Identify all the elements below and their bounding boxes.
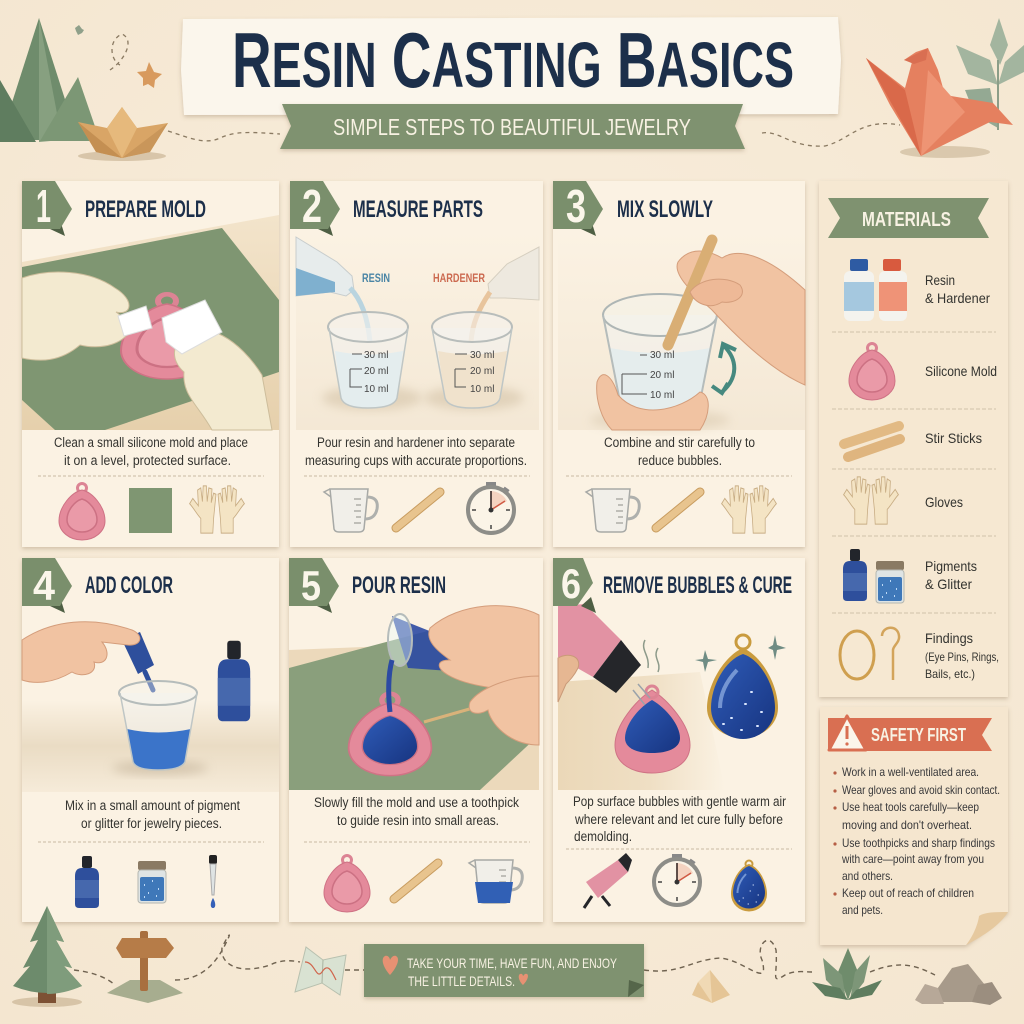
step text bbox=[54, 435, 248, 468]
safety bullet list: and others. bbox=[842, 869, 893, 883]
illustration: mixing cup bbox=[590, 294, 730, 430]
label: resin: RESIN bbox=[362, 271, 390, 285]
step text: Clean a small silicone mold and place bbox=[54, 435, 248, 450]
icon: origami bird bbox=[866, 48, 1013, 158]
illustration: lower hand bbox=[597, 375, 708, 430]
step number badge 1 bbox=[22, 180, 72, 236]
step text: to guide resin into small areas. bbox=[337, 813, 499, 828]
illustration: resin cup bbox=[322, 312, 422, 410]
step text: where relevant and let cure fully before bbox=[574, 812, 783, 827]
material: resin and hardener bbox=[844, 259, 990, 321]
material: pigments and glitter: Pigments bbox=[925, 558, 977, 574]
step number badge 4 bbox=[22, 558, 72, 613]
material: gloves bbox=[844, 477, 963, 524]
top decoration: origami tree bbox=[0, 18, 100, 142]
material: pigments and glitter: & Glitter bbox=[925, 576, 972, 592]
illustration: table and mat bbox=[289, 625, 539, 790]
illustration: resin cup: 30 ml bbox=[364, 350, 388, 361]
illustration: backdrop bbox=[558, 232, 805, 430]
illustration: tilted pouring cup bbox=[388, 614, 472, 712]
panel: step 3 mix slowly bbox=[553, 180, 805, 547]
illustration: gripping finger bbox=[690, 279, 742, 306]
material: gloves: Gloves bbox=[925, 494, 963, 510]
illustration: hardener cup bbox=[424, 312, 524, 410]
material: resin and hardener: Resin bbox=[925, 272, 955, 288]
illustration: upper hand bbox=[429, 606, 539, 692]
illustration: pink mold bbox=[121, 294, 213, 379]
step text bbox=[305, 435, 527, 468]
step number badge 6 bbox=[553, 558, 596, 613]
step text: Combine and stir carefully to bbox=[604, 435, 755, 450]
step heading: ADD COLOR bbox=[85, 572, 173, 599]
illustration: pigment bottle bbox=[218, 641, 250, 721]
material: findings: Findings bbox=[925, 630, 973, 646]
step text bbox=[573, 794, 786, 844]
illustration: mold filled with resin bbox=[349, 694, 431, 776]
subtitle ribbon bbox=[280, 104, 745, 149]
label: hardener: HARDENER bbox=[433, 271, 485, 285]
illustration: hardener cup: 30 ml bbox=[470, 350, 494, 361]
panel: step 2 measure parts bbox=[290, 180, 543, 547]
illustration: mold with blue resin bbox=[615, 686, 690, 773]
icon: sparkles bbox=[695, 635, 786, 672]
safety bullet list: moving and don't overheat. bbox=[842, 818, 972, 832]
panel: materials bbox=[819, 181, 1008, 697]
safety bullet list: with care—point away from you bbox=[841, 852, 984, 866]
step text: reduce bubbles. bbox=[638, 453, 722, 468]
step text: Mix in a small amount of pigment bbox=[65, 798, 240, 813]
step heading: MEASURE PARTS bbox=[353, 196, 483, 223]
tool icons bbox=[75, 855, 217, 908]
step text: Pour resin and hardener into separate bbox=[317, 435, 515, 450]
safety ribbon bbox=[828, 716, 992, 751]
step text bbox=[314, 795, 519, 828]
illustration: stir stick bbox=[668, 240, 712, 345]
step number badge 4: 4 bbox=[33, 562, 56, 609]
step text: demolding. bbox=[574, 829, 632, 844]
materials ribbon bbox=[828, 198, 989, 238]
step text: measuring cups with accurate proportions. bbox=[305, 453, 527, 468]
panel: step 1 prepare mold bbox=[22, 180, 279, 547]
illustration: hardener cup: 20 ml bbox=[470, 366, 494, 377]
illustration: mixing cup: 30 ml bbox=[650, 350, 674, 361]
material: findings bbox=[840, 628, 999, 681]
icon: origami leaves bbox=[956, 18, 1024, 130]
illustration: hand with dropper bottle bbox=[22, 622, 154, 690]
title banner bbox=[181, 16, 841, 115]
safety bullet list: and pets. bbox=[842, 903, 883, 917]
step number badge 2: 2 bbox=[302, 180, 322, 232]
illustration: finished pendant bbox=[707, 635, 778, 739]
material: findings: Bails, etc.) bbox=[925, 667, 975, 681]
dashed trails at top bbox=[110, 34, 900, 146]
icon: small paper stars bbox=[75, 25, 162, 88]
icon: origami boat bbox=[78, 107, 168, 161]
safety bullet list: Use heat tools carefully—keep bbox=[842, 800, 979, 814]
illustration: wood surface bbox=[558, 672, 725, 790]
illustration: resin cup: 20 ml bbox=[364, 366, 388, 377]
step text: or glitter for jewelry pieces. bbox=[81, 816, 222, 831]
step text bbox=[65, 798, 240, 831]
material: findings: (Eye Pins, Rings, bbox=[925, 650, 999, 664]
material: stir sticks bbox=[844, 426, 982, 457]
step heading: POUR RESIN bbox=[352, 572, 446, 599]
tool icons bbox=[59, 484, 244, 540]
step heading: PREPARE MOLD bbox=[85, 196, 206, 223]
icon: small heart bbox=[519, 974, 528, 985]
material: stir sticks: Stir Sticks bbox=[925, 430, 982, 446]
tool icons bbox=[324, 856, 522, 912]
illustration: hardener cup: 10 ml bbox=[470, 384, 494, 395]
illustration: backdrop bbox=[22, 700, 279, 792]
step heading: REMOVE BUBBLES & CURE bbox=[603, 572, 792, 599]
step text: Slowly fill the mold and use a toothpick bbox=[314, 795, 519, 810]
panel: safety first bbox=[820, 707, 1008, 945]
illustration: mixing cup: 20 ml bbox=[650, 370, 674, 381]
step text: Pop surface bubbles with gentle warm air bbox=[573, 794, 786, 809]
safety ribbon: SAFETY FIRST bbox=[871, 725, 966, 745]
step number badge 1: 1 bbox=[36, 180, 51, 232]
materials ribbon: MATERIALS bbox=[862, 209, 951, 231]
illustration: heat gun and hand bbox=[558, 604, 659, 705]
step number badge 5: 5 bbox=[301, 562, 321, 609]
illustration: mixing cup: 10 ml bbox=[650, 390, 674, 401]
material: resin and hardener: & Hardener bbox=[925, 290, 990, 306]
illustration: table and mat bbox=[22, 215, 279, 430]
step heading: MIX SLOWLY bbox=[617, 196, 713, 223]
icon: stir arrow bbox=[712, 344, 736, 393]
icon: paper plant bbox=[812, 948, 882, 1000]
safety bullet list: Keep out of reach of children bbox=[842, 886, 974, 900]
tool icons bbox=[584, 853, 767, 912]
title: RESIN CASTING BASICS bbox=[232, 16, 794, 104]
safety bullet list: Work in a well-ventilated area. bbox=[842, 765, 979, 779]
illustration: backdrop bbox=[296, 232, 539, 430]
step text: it on a level, protected surface. bbox=[64, 453, 231, 468]
material: silicone mold bbox=[849, 344, 997, 400]
illustration: resin bottle bbox=[296, 237, 370, 342]
step number badge 5 bbox=[289, 558, 339, 613]
page curl bbox=[966, 912, 1008, 945]
note text: TAKE YOUR TIME, HAVE FUN, AND ENJOY bbox=[407, 955, 617, 971]
icon: wooden signpost bbox=[107, 931, 183, 1003]
closing note banner bbox=[364, 944, 644, 997]
step text bbox=[604, 435, 755, 468]
illustration: hardener bottle bbox=[471, 247, 539, 342]
tool icons bbox=[324, 482, 514, 533]
step number badge 6: 6 bbox=[561, 560, 581, 607]
safety bullet list bbox=[833, 765, 1000, 917]
icon: folded map bbox=[295, 947, 346, 995]
note text line two: THE LITTLE DETAILS. bbox=[408, 973, 515, 989]
icon: paper tree bbox=[12, 906, 82, 1007]
panel: step 6 remove bubbles and cure bbox=[553, 558, 805, 922]
material: silicone mold: Silicone Mold bbox=[925, 363, 997, 379]
footer dashed trails bbox=[74, 935, 935, 985]
panel: step 4 add color bbox=[22, 558, 279, 922]
step number badge 2 bbox=[290, 180, 340, 236]
icon: heart bbox=[383, 956, 398, 975]
subtitle: SIMPLE STEPS TO BEAUTIFUL JEWELRY bbox=[333, 114, 691, 140]
illustration: gloved hands with wipes bbox=[22, 272, 272, 430]
illustration: cup with blue liquid bbox=[112, 681, 208, 775]
safety bullet list: Use toothpicks and sharp findings bbox=[842, 836, 995, 850]
step number badge 3 bbox=[553, 180, 603, 236]
material: pigments and glitter bbox=[843, 549, 977, 603]
icon: origami flame bbox=[692, 970, 730, 1003]
panel: step 5 pour resin bbox=[289, 558, 543, 922]
step number badge 3: 3 bbox=[566, 180, 586, 232]
illustration: resin cup: 10 ml bbox=[364, 384, 388, 395]
icon: paper rocks bbox=[915, 964, 1002, 1005]
illustration: lower hand and toothpick bbox=[424, 676, 539, 745]
tool icons bbox=[586, 486, 776, 533]
illustration: upper hand bbox=[677, 251, 805, 385]
